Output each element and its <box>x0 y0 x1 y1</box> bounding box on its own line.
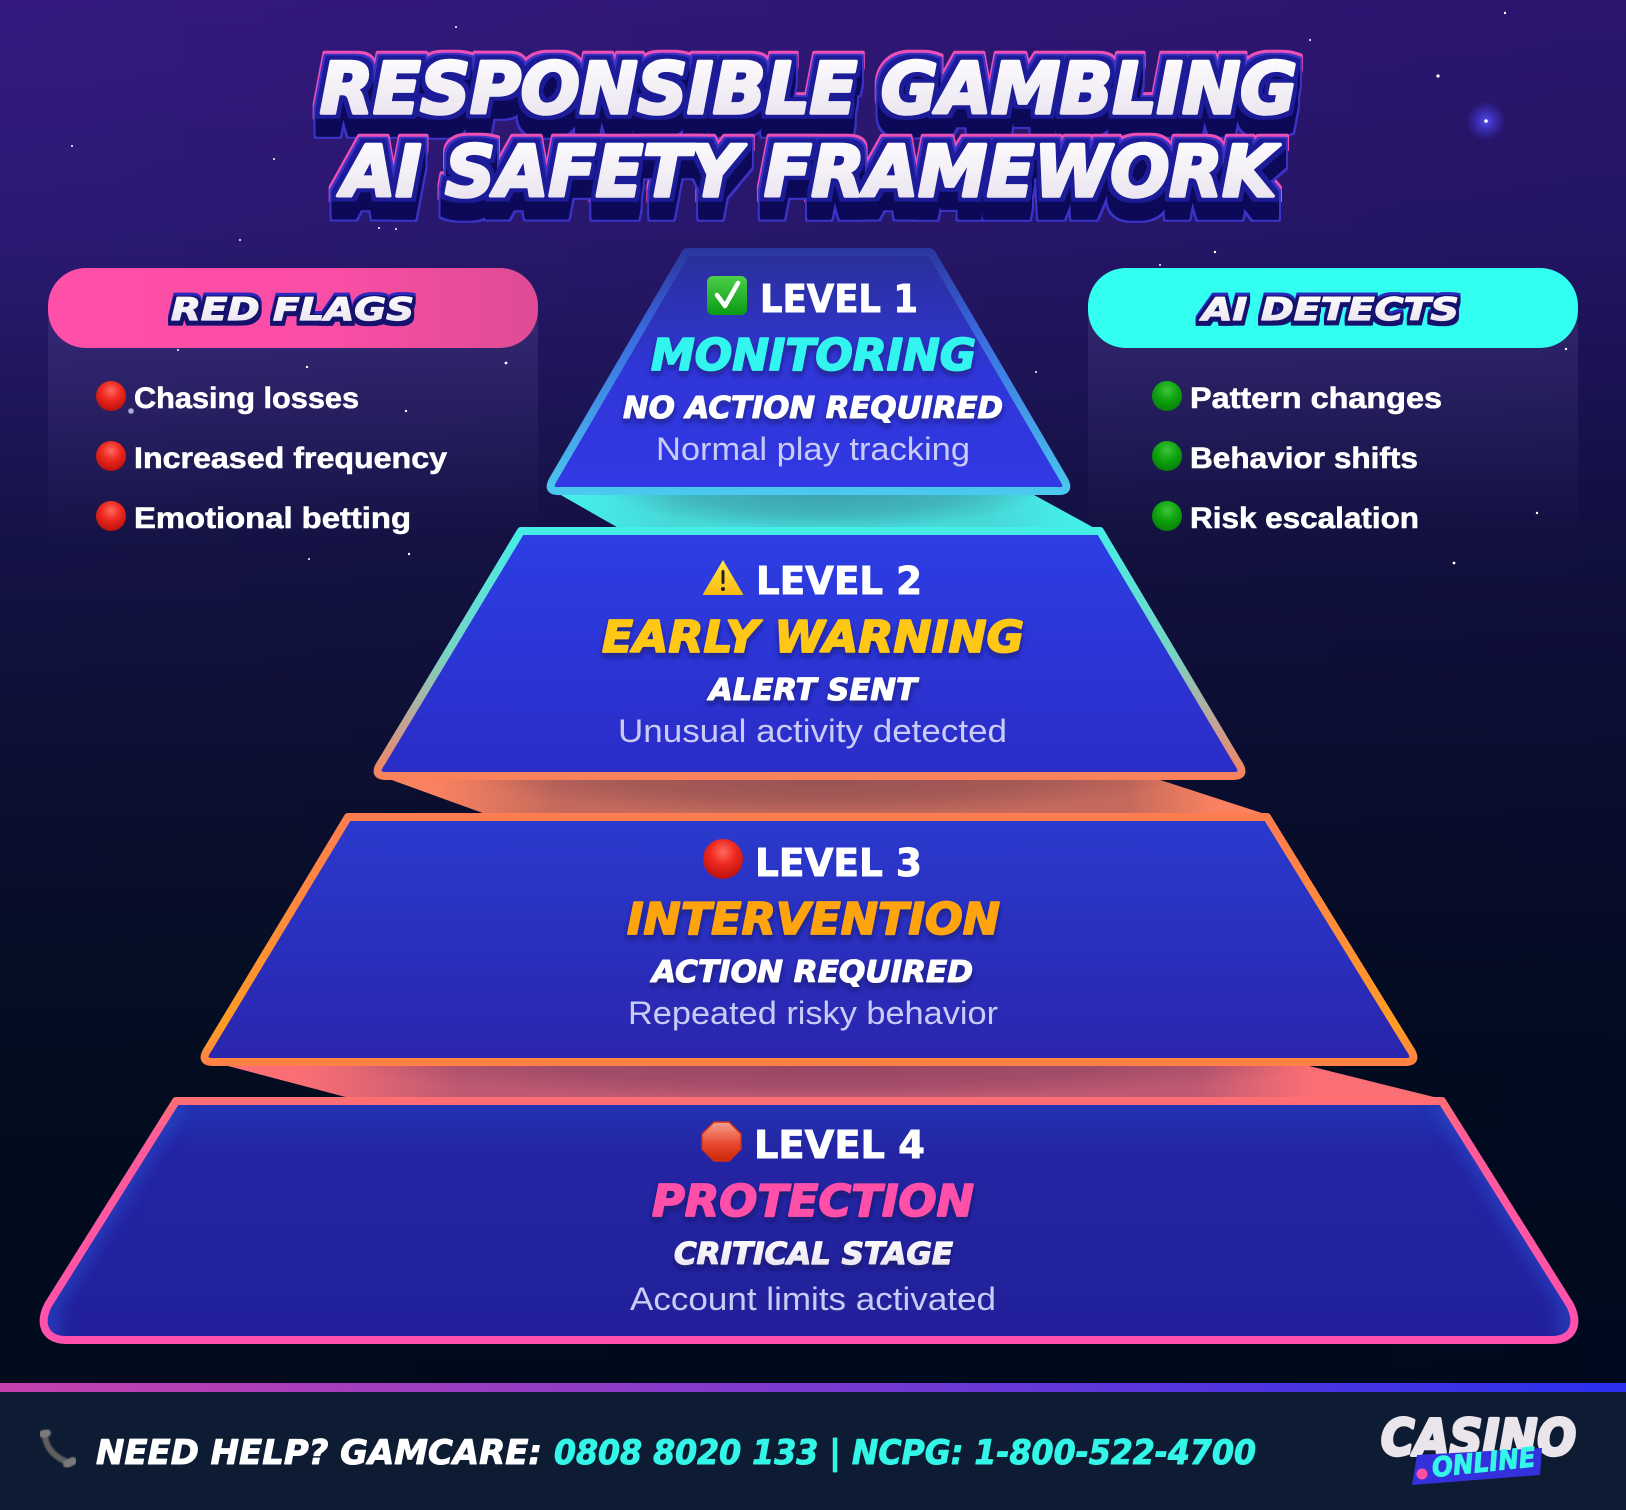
repeated risky behavior: Repeated risky behavior <box>628 995 998 1031</box>
level 2 label: LEVEL 2 <box>756 559 922 603</box>
icon: green dot 1 <box>1152 381 1182 411</box>
connector: level 2 to 3 <box>378 775 1271 816</box>
helpline numbers: 0808 8020 133 | NCPG: 1-800-522-4700 <box>554 1433 1256 1473</box>
icon: green dot 3 <box>1152 501 1182 531</box>
no action required: NO ACTION REQUIRED <box>623 391 1003 426</box>
level 2 tier <box>378 531 1242 776</box>
red flags heading: RED FLAGS <box>171 292 414 328</box>
intervention heading: INTERVENTION <box>627 894 1000 945</box>
tier edge glow <box>48 1101 1570 1340</box>
icon: phone <box>43 1433 73 1464</box>
icon: red dot 3 <box>96 501 126 531</box>
normal play tracking: Normal play tracking <box>656 431 970 467</box>
level 3 label: LEVEL 3 <box>755 841 922 885</box>
helpline label: NEED HELP? GAMCARE: <box>96 1433 542 1473</box>
connector: level 1 to 2 <box>552 490 1098 530</box>
tier shape <box>551 252 1066 491</box>
action required: ACTION REQUIRED <box>650 955 973 990</box>
logo: casino online <box>1381 1409 1576 1485</box>
tier shape <box>205 817 1413 1062</box>
panel: ai detects <box>1088 268 1578 543</box>
panel body <box>48 308 538 543</box>
red flags header pill <box>48 268 538 348</box>
connector: level 3 to 4 <box>209 1061 1446 1100</box>
level 4 label: LEVEL 4 <box>754 1123 925 1167</box>
item: chasing losses: Chasing losses <box>134 382 359 415</box>
account limits activated: Account limits activated <box>630 1281 996 1317</box>
icon: red dot 2 <box>96 441 126 471</box>
panel: red flags <box>48 268 538 543</box>
level 3 tier <box>205 817 1413 1062</box>
ai detects heading: AI DETECTS <box>1198 292 1459 328</box>
item: risk escalation: Risk escalation <box>1190 502 1419 535</box>
title line 1: RESPONSIBLE GAMBLING <box>320 48 1297 130</box>
icon: red circle <box>703 839 743 879</box>
level 1 tier <box>551 252 1066 491</box>
alert sent: ALERT SENT <box>707 673 920 708</box>
icon: stop sign <box>702 1122 741 1161</box>
unusual activity detected: Unusual activity detected <box>618 713 1007 749</box>
title line 2: AI SAFETY FRAMEWORK <box>337 131 1281 213</box>
protection heading: PROTECTION <box>652 1176 974 1227</box>
logo dot <box>1416 1468 1428 1480</box>
starfield <box>71 12 1567 564</box>
icon: check mark box <box>707 276 747 315</box>
early warning heading: EARLY WARNING <box>602 612 1024 663</box>
item: behavior shifts: Behavior shifts <box>1190 442 1418 475</box>
item: pattern changes: Pattern changes <box>1190 382 1442 415</box>
tier shape <box>44 1101 1574 1340</box>
level 4 tier <box>44 1101 1574 1340</box>
title <box>320 48 1297 213</box>
item: increased frequency: Increased frequency <box>134 442 447 475</box>
monitoring heading: MONITORING <box>651 330 976 381</box>
tier shape <box>378 531 1242 776</box>
item: emotional betting: Emotional betting <box>134 502 411 535</box>
footer <box>0 1383 1626 1510</box>
tier outline <box>44 1101 1574 1340</box>
panel body <box>1088 308 1578 543</box>
footer stripe <box>0 1383 1626 1392</box>
icon: warning triangle <box>703 560 743 595</box>
critical stage: CRITICAL STAGE <box>674 1237 954 1272</box>
logo badge <box>1412 1448 1542 1485</box>
icon: red dot 1 <box>96 381 126 411</box>
ai detects header pill <box>1088 268 1578 348</box>
footer background <box>0 1390 1626 1510</box>
icon: green dot 2 <box>1152 441 1182 471</box>
logo word casino: CASINO <box>1381 1409 1576 1467</box>
logo word online: ONLINE <box>1430 1442 1538 1484</box>
level 1 label: LEVEL 1 <box>760 277 918 321</box>
